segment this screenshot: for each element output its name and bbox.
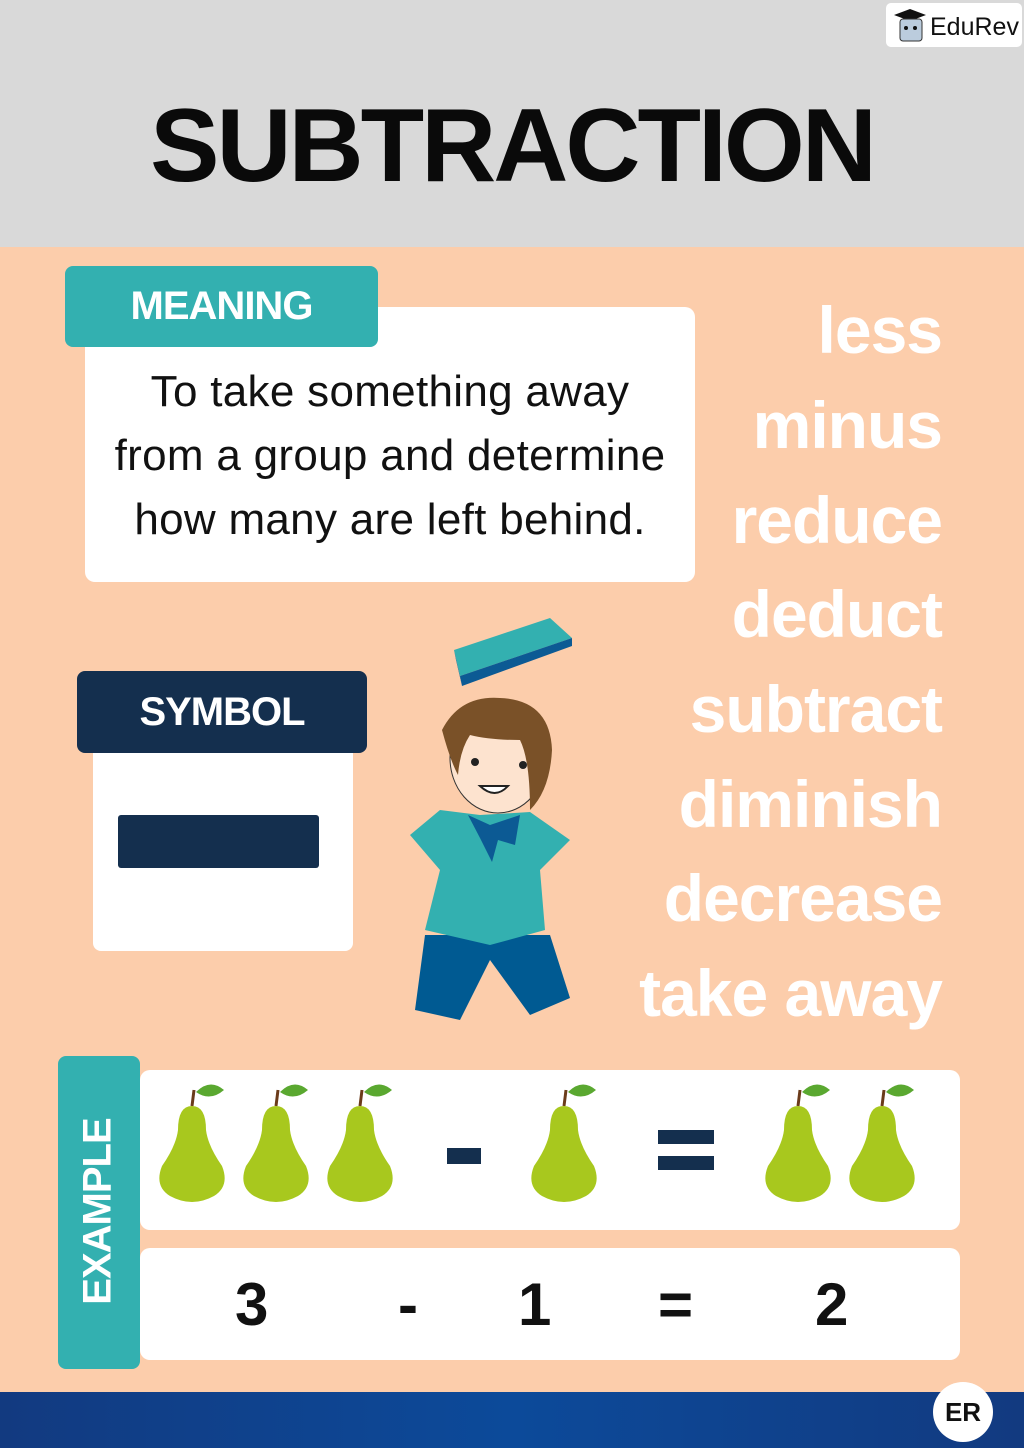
header band xyxy=(0,0,1024,247)
footer logo ER: ER xyxy=(945,1397,981,1427)
meaning text: how many are left behind. xyxy=(134,495,646,544)
minus symbol xyxy=(118,815,319,868)
panel: meaning xyxy=(65,266,695,582)
meaning text xyxy=(115,367,665,544)
synonyms list xyxy=(639,293,942,1030)
footer logo ER xyxy=(933,1382,993,1442)
pears row xyxy=(140,1070,960,1230)
numbers row: 3 xyxy=(235,1271,268,1338)
meaning text: To take something away xyxy=(151,367,629,416)
numbers row xyxy=(140,1248,960,1360)
title: SUBTRACTION xyxy=(150,88,874,204)
example label xyxy=(58,1056,140,1369)
example label: EXAMPLE xyxy=(76,1118,120,1305)
illustration: boy with minus bar xyxy=(410,618,572,1020)
synonyms list: diminish xyxy=(679,767,942,841)
numbers row: 1 xyxy=(518,1271,551,1338)
meaning label: MEANING xyxy=(131,284,312,328)
symbol label: SYMBOL xyxy=(139,690,305,734)
synonyms list: less xyxy=(818,293,942,367)
synonyms list: take away xyxy=(639,956,942,1030)
synonyms list: decrease xyxy=(664,861,942,935)
synonyms list: deduct xyxy=(732,577,942,651)
synonyms list: reduce xyxy=(732,483,942,557)
synonyms list: subtract xyxy=(690,672,942,746)
numbers row: 2 xyxy=(815,1271,848,1338)
meaning label xyxy=(65,266,378,347)
logo: EduRev xyxy=(886,3,1022,47)
panel: example xyxy=(58,1056,960,1369)
meaning text: from a group and determine xyxy=(115,431,665,480)
logo: EduRev: EduRev xyxy=(930,13,1019,41)
footer band xyxy=(0,1392,1024,1448)
symbol label xyxy=(77,671,367,753)
panel: symbol xyxy=(77,671,367,951)
numbers row: = xyxy=(658,1271,693,1338)
numbers row: - xyxy=(398,1271,418,1338)
synonyms list: minus xyxy=(753,388,942,462)
